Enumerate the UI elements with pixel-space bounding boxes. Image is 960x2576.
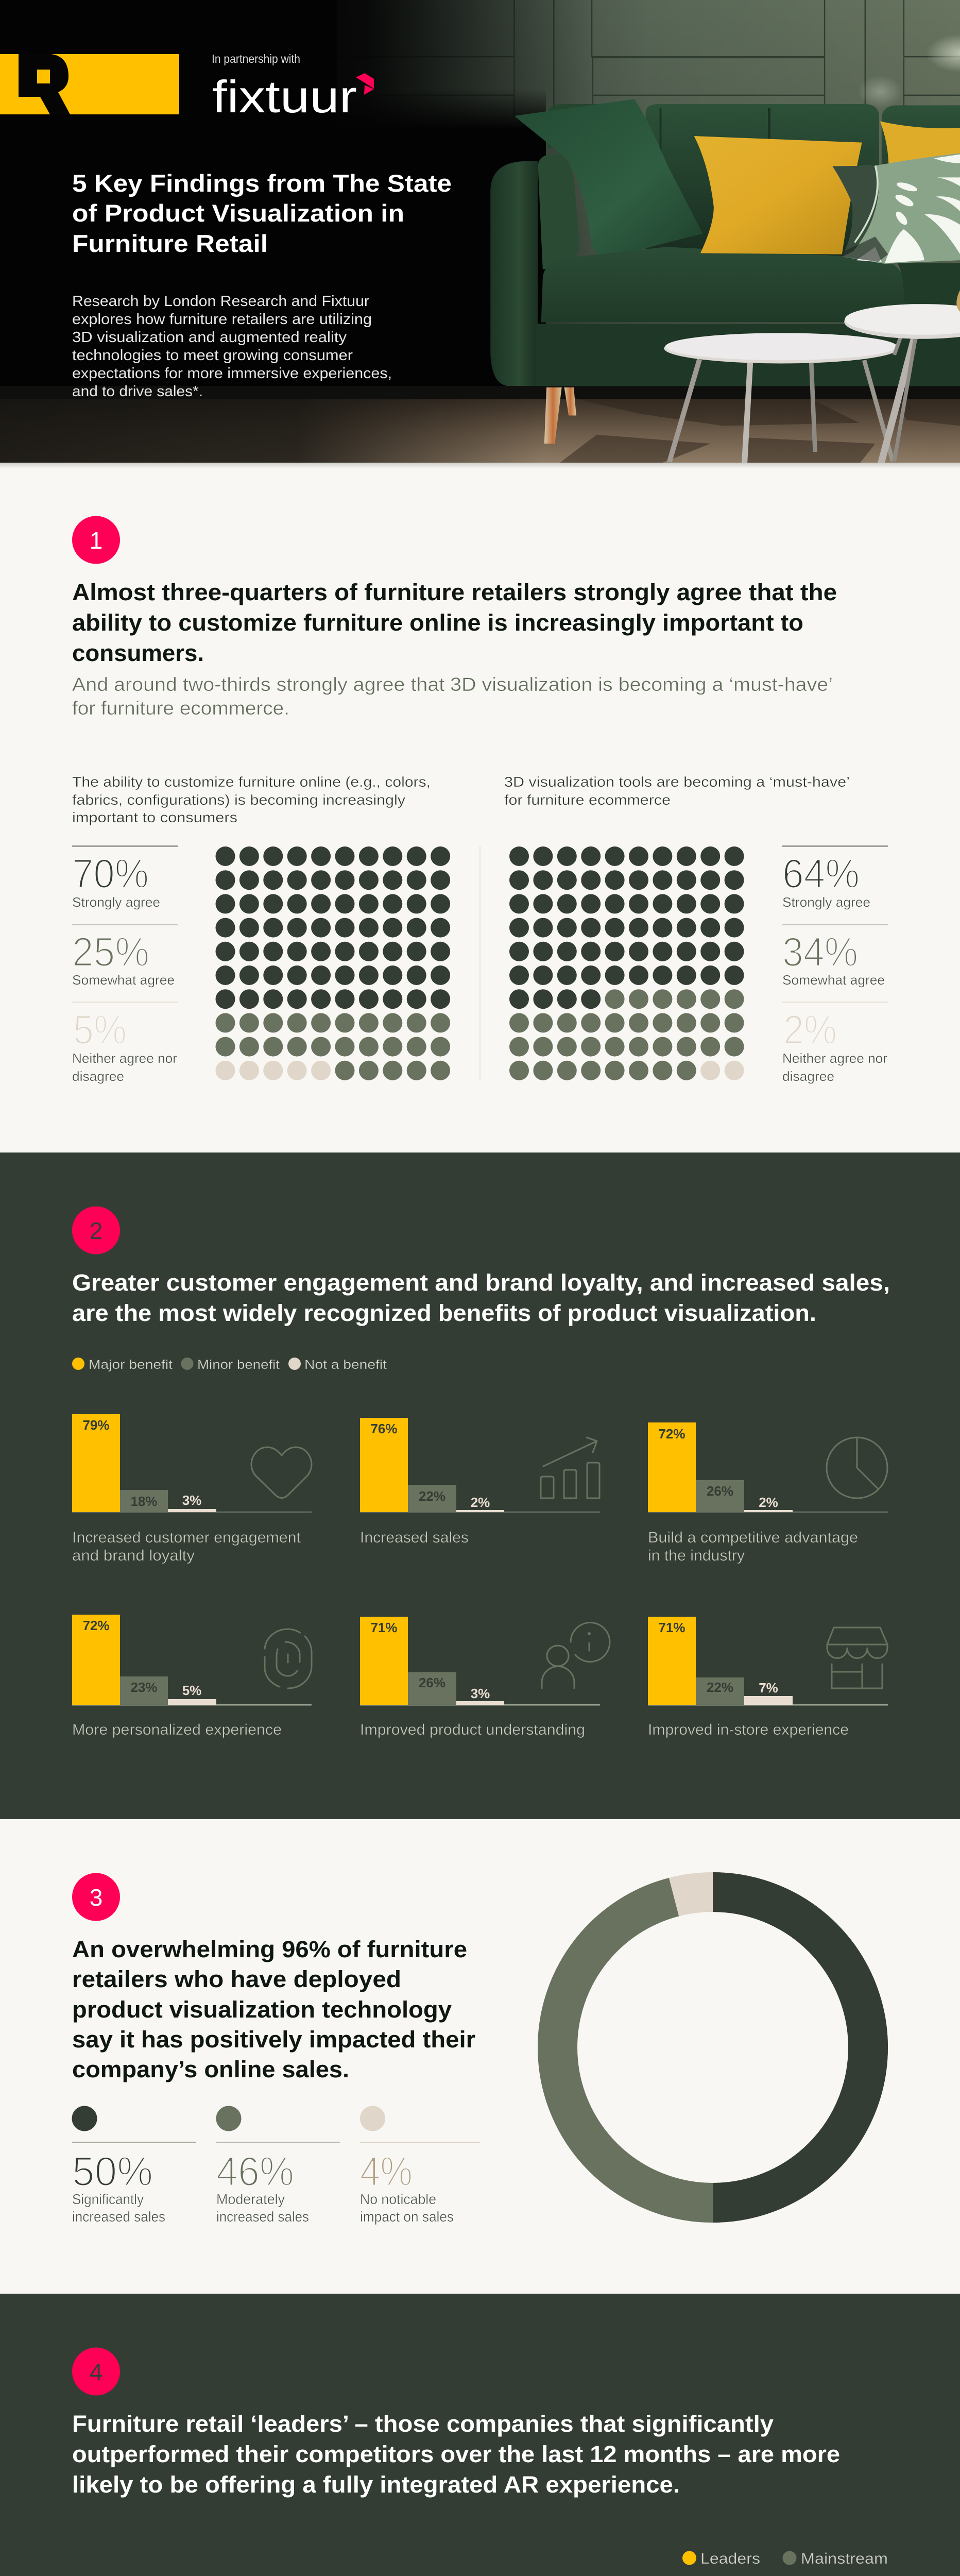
chart: product understanding: 26% [419,1675,445,1690]
badge 4 [72,2347,120,2396]
stat: 50% significantly increased sales [72,2106,196,2225]
left stats column: 5% [73,1007,127,1053]
badge 4: 4 [90,2359,102,2385]
hero intro text: and to drive sales*. [72,383,203,400]
icon: fingerprint [265,1629,312,1688]
icon: rising bar chart [541,1437,599,1498]
hero intro text: explores how furniture retailers are utilizing [72,311,372,328]
stat: 46% moderately increased sales: increased sales [216,2209,309,2225]
icon: storefront [827,1628,887,1688]
chart: personalized experience: 5% [182,1683,201,1698]
chart: competitive advantage: Build a competitive advantage [648,1529,858,1546]
stat: 46% moderately increased sales: 46% [216,2148,294,2194]
right stats column: Neither agree nor [782,1050,887,1066]
hero intro text: Research by London Research and Fixtuur [72,293,369,310]
left stats column: Somewhat agree [72,972,175,988]
chart: competitive advantage: in the industry [648,1547,745,1564]
chart: increased customer engagement: 79% [82,1417,110,1433]
left stats column: Strongly agree [72,894,160,910]
heading 3 [72,1936,475,2082]
heading 4: outperformed their competitors over the last 12 months – are more [72,2441,840,2467]
hero banner [0,0,960,464]
left stats column [72,845,178,1084]
chart: in-store experience: Improved in-store experience [648,1721,849,1738]
right stats column: Somewhat agree [782,972,885,988]
badge 2: 2 [90,1217,102,1244]
soft shadow under the hero [0,463,960,469]
badge 1 [72,516,120,564]
chart: in-store experience: 22% [707,1680,733,1695]
chart: in-store experience [648,1617,888,1738]
stat: 46% moderately increased sales: Moderately [216,2191,285,2207]
legend: leaders vs mainstream: Leaders [700,2550,760,2567]
legend: benefit types: Not a benefit [304,1358,387,1372]
heading 4: Furniture retail ‘leaders’ – those companies that significantly [72,2411,774,2437]
stat: 50% significantly increased sales: 50% [72,2148,153,2194]
heading 3: say it has positively impacted their [72,2026,475,2053]
subheading 1: And around two-thirds strongly agree that 3D visualization is becoming a ‘must-have’ [72,674,833,695]
chart: personalized experience: More personalized experience [72,1721,282,1738]
hero title [72,170,452,257]
hero intro text: expectations for more immersive experiences, [72,365,392,382]
icon: heart [251,1447,312,1498]
right stats column: 64% [782,851,860,896]
heading 1: ability to customize furniture online is increasingly important to [72,609,803,636]
left chart caption: important to consumers [72,809,237,825]
partnership note: In partnership with [212,52,300,65]
stat: 46% moderately increased sales [216,2106,340,2225]
right dot matrix: 64 / 34 / 2 [519,856,734,1071]
left chart caption [72,774,431,825]
chart: product understanding: 3% [471,1686,490,1701]
hero intro text [72,293,392,400]
chart: in-store experience: 7% [759,1680,778,1696]
hero title: of Product Visualization in [72,199,404,227]
stat: 4% no noticable impact: 4% [360,2148,413,2194]
chart: increased customer engagement: Increased customer engagement [72,1529,301,1546]
legend: benefit types: Major benefit [89,1358,173,1372]
right stats column [782,845,888,1084]
right stats column: Strongly agree [782,894,870,910]
heading 1: Almost three-quarters of furniture retailers strongly agree that the [72,579,837,605]
right chart caption [504,774,850,808]
panel: finding 1 [72,516,888,1084]
right stats column: 2% [783,1007,837,1053]
chart: increased sales: 2% [471,1495,490,1510]
chart: personalized experience [72,1615,312,1738]
chart: competitive advantage [648,1422,888,1564]
chart: increased sales: 76% [370,1421,398,1436]
chart: increased sales: Increased sales [360,1529,469,1546]
left stats column: Neither agree nor [72,1050,177,1066]
chart: increased sales [360,1418,600,1546]
left stats column: disagree [72,1069,124,1084]
panel: finding 4 [0,2294,960,2576]
chart: increased customer engagement: 18% [130,1494,158,1509]
logo: fixtuur: fixtuur [212,71,357,122]
stat: 4% no noticable impact [360,2106,480,2225]
hero photo: panelled green wall [337,0,960,399]
stat: 50% significantly increased sales: Significantly [72,2191,144,2207]
right stats column: disagree [782,1069,834,1084]
left stats column: 70% [72,851,149,896]
chart: product understanding: Improved product understanding [360,1721,585,1738]
chart: competitive advantage: 2% [759,1495,778,1510]
hero intro text: technologies to meet growing consumer [72,347,353,364]
right chart caption: for furniture ecommerce [504,792,671,808]
left dot matrix: 70 / 25 / 5 [226,856,441,1071]
panel: finding 2 [0,1153,960,1819]
hero title: 5 Key Findings from The State [72,170,452,197]
legend: benefit types: Minor benefit [197,1358,280,1372]
legend: leaders vs mainstream [682,2550,888,2567]
heading 1 [72,579,837,666]
heading 3: An overwhelming 96% of furniture [72,1936,467,1962]
heading 3: product visualization technology [72,1996,452,2023]
icon: pie chart [827,1437,887,1498]
heading 4: likely to be offering a fully integrated AR experience. [72,2471,680,2498]
panel: finding 3 [72,1873,868,2225]
subheading 1 [72,674,833,719]
badge 3: 3 [90,1884,102,1911]
stat: 4% no noticable impact: No noticable [360,2191,436,2207]
chart: personalized experience: 23% [130,1680,158,1695]
subheading 1: for furniture ecommerce. [72,698,289,719]
heading 3: company’s online sales. [72,2056,349,2082]
chart: competitive advantage: 26% [707,1483,733,1499]
heading 1: consumers. [72,640,204,666]
badge 3 [72,1873,120,1921]
left stats column: 25% [72,929,149,975]
heading 2: are the most widely recognized benefits of product visualization. [72,1300,816,1326]
badge 2 [72,1207,120,1254]
heading 2: Greater customer engagement and brand loyalty, and increased sales, [72,1269,890,1296]
badge 1: 1 [90,527,102,554]
chart: in-store experience: 71% [658,1620,685,1635]
hero title: Furniture Retail [72,230,268,257]
left chart caption: fabrics, configurations) is becoming increasingly [72,792,405,808]
chart: product understanding [360,1617,600,1738]
chart: product understanding: 71% [370,1620,398,1635]
chart: increased sales: 22% [419,1488,445,1504]
stat: 4% no noticable impact: impact on sales [360,2209,454,2225]
chart: competitive advantage: 72% [658,1426,685,1442]
logo: London Research [0,54,179,114]
hero photo: herringbone floor [0,89,960,464]
chart: increased customer engagement: and brand loyalty [72,1547,195,1564]
left chart caption: The ability to customize furniture online (e.g., colors, [72,774,431,790]
heading 4 [72,2411,840,2498]
hero intro text: 3D visualization and augmented reality [72,329,347,346]
legend: leaders vs mainstream: Mainstream [801,2550,888,2567]
icon: person with info bubble [542,1622,610,1688]
chart: increased customer engagement: 3% [182,1493,201,1508]
stat: 50% significantly increased sales: increased sales [72,2209,165,2225]
donut chart: sales impact [557,1892,868,2203]
heading 2 [72,1269,890,1326]
chart: increased customer engagement [72,1414,312,1564]
right chart caption: 3D visualization tools are becoming a ‘must-have’ [504,774,850,790]
chart: personalized experience: 72% [82,1618,110,1633]
right stats column: 34% [782,929,858,975]
hero photo: green sofa with yellow cushions and side tables [490,99,960,464]
heading 3: retailers who have deployed [72,1966,401,1992]
legend: benefit types [72,1358,387,1372]
